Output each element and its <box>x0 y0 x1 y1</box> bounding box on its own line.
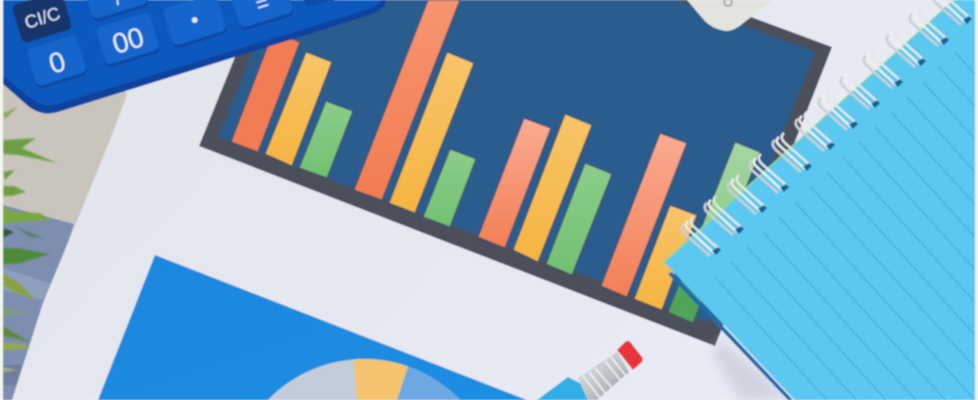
key: C/C <box>11 0 73 44</box>
notebook underside <box>663 0 975 275</box>
key: 00 <box>95 12 161 68</box>
pencil ferrule <box>578 352 629 400</box>
bars group 2 <box>354 0 476 227</box>
bars group 3 <box>478 114 612 275</box>
calculator body <box>3 0 381 105</box>
blue panel <box>98 255 527 400</box>
bar chart panel <box>199 0 832 346</box>
calculator body shadow edge <box>3 0 386 114</box>
pie chart panel <box>98 255 527 400</box>
key: top right <box>299 0 348 8</box>
page margin strip <box>975 0 978 400</box>
key: 0 <box>26 34 88 90</box>
notebook edge shadow <box>668 272 793 400</box>
bars group 4 <box>601 133 760 323</box>
key: 0: 0 <box>45 45 69 80</box>
notebook spiral binding <box>682 0 972 256</box>
white device corner <box>687 0 773 31</box>
pencil eraser <box>617 341 643 370</box>
left edge strip <box>0 0 3 400</box>
notebook <box>663 0 978 400</box>
key: 00: 00 <box>109 21 148 60</box>
key: C/C: CI/C <box>22 3 62 33</box>
calculator <box>3 0 386 114</box>
chart frame <box>199 0 832 346</box>
key: equals <box>229 0 295 31</box>
notebook ruled lines <box>715 52 975 400</box>
pencil <box>537 341 643 400</box>
notebook cover <box>665 0 975 400</box>
bars group 1 <box>231 32 353 178</box>
pie chart <box>268 359 460 400</box>
pencil body <box>537 377 588 400</box>
plant <box>3 91 57 372</box>
key: 7 <box>83 0 150 23</box>
chart background <box>218 0 815 322</box>
key: decimal point <box>162 0 228 49</box>
notebook shadow on paper <box>712 340 793 400</box>
